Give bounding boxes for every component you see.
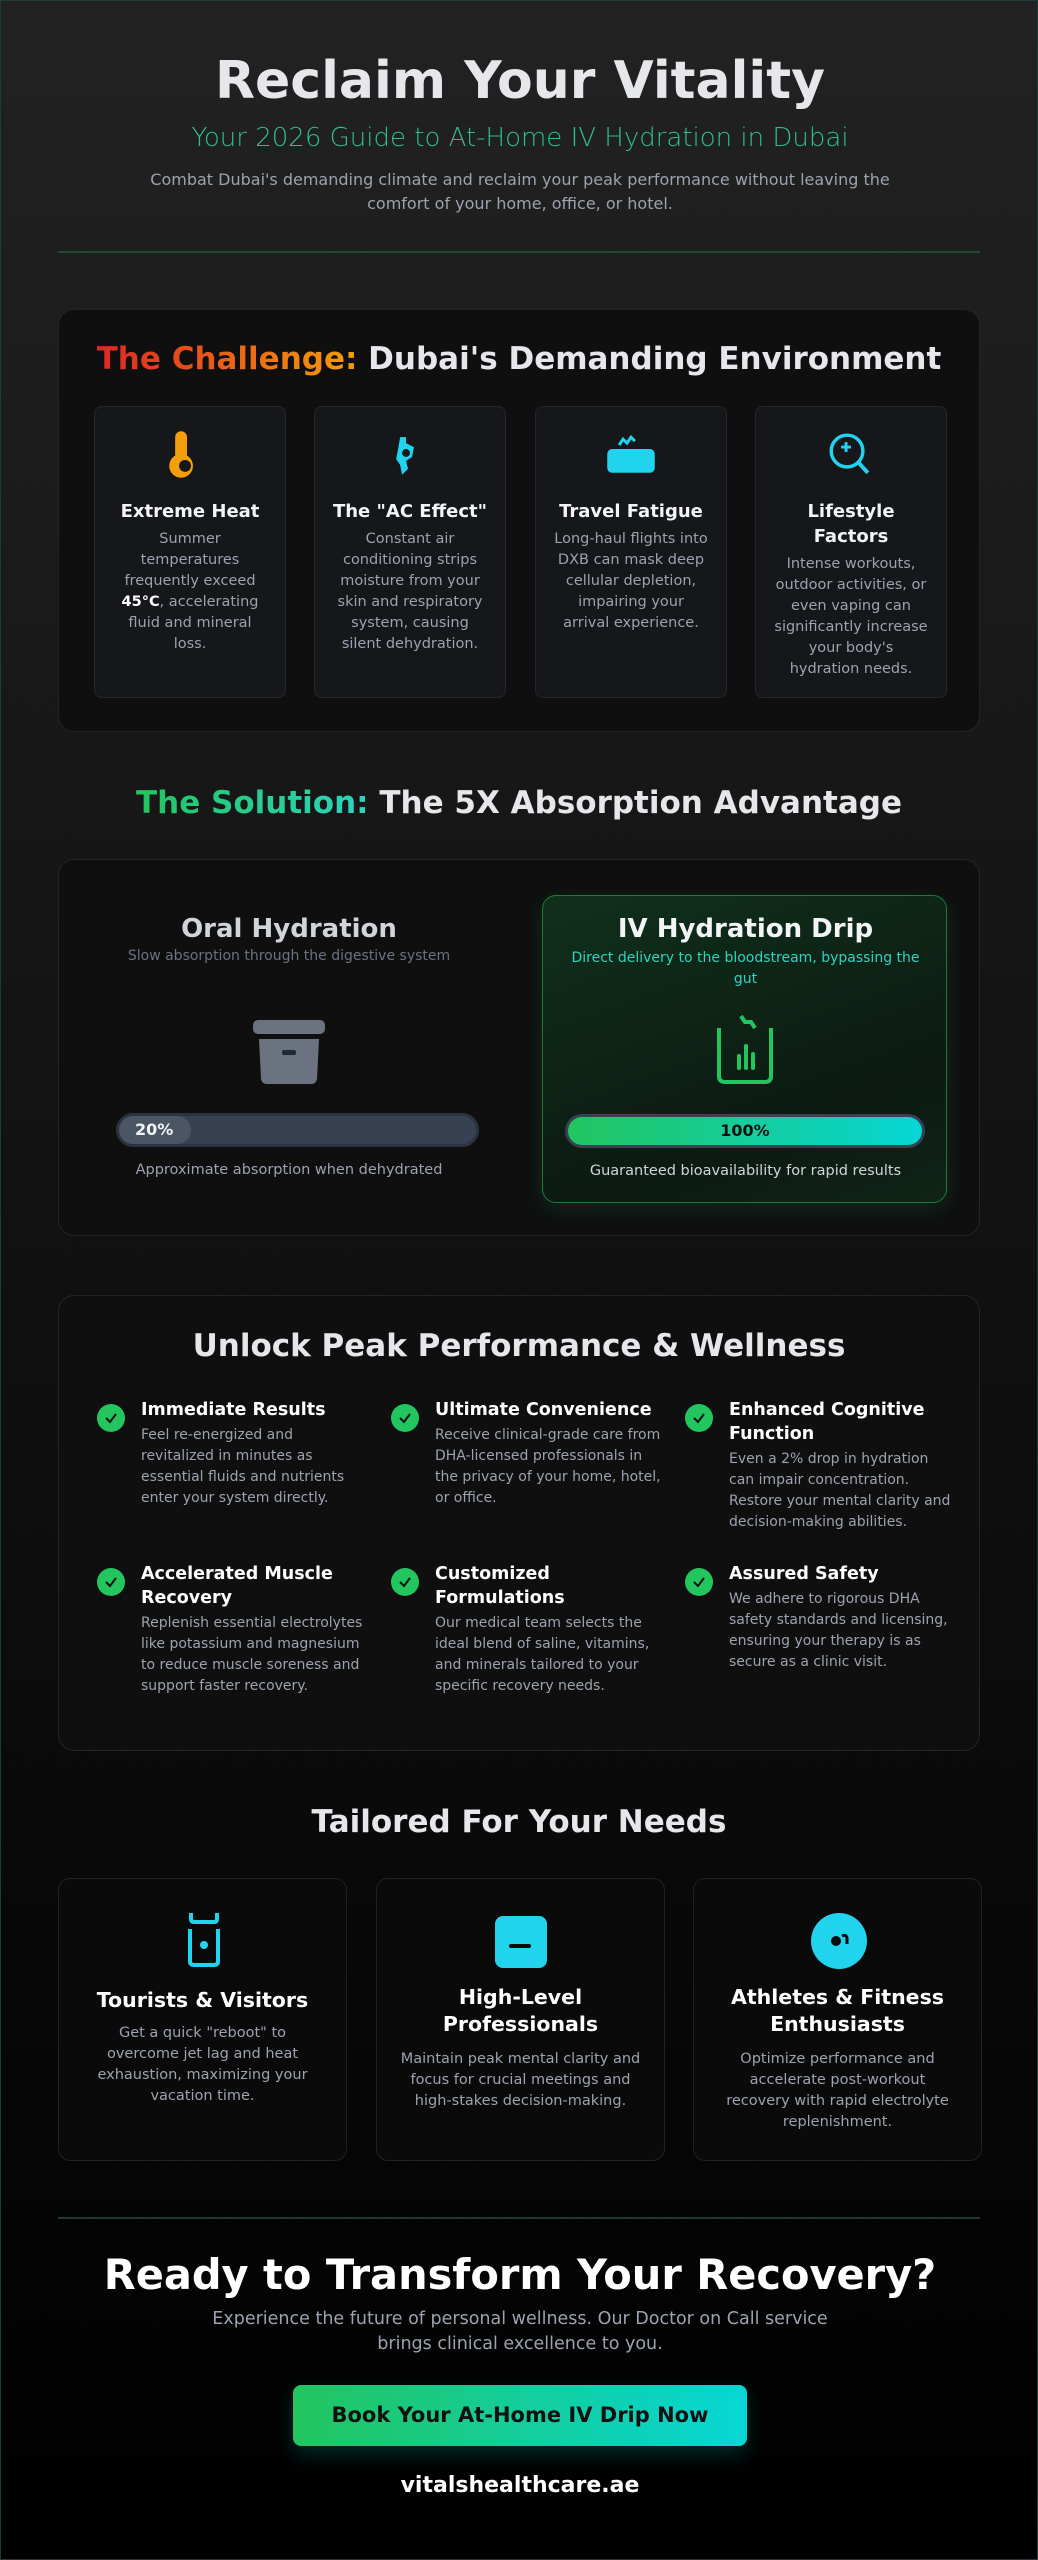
benefit: convenience xyxy=(391,1400,661,1506)
subtitle: Your 2026 Guide to At-Home IV Hydration in Dubai xyxy=(191,123,849,153)
card: travel fatigue xyxy=(535,406,727,698)
card: travel fatigue: Long-haul flights into DXB can mask deep cellular depletion, impairing your arrival experience. xyxy=(554,531,708,631)
card: lifestyle: Lifestyle xyxy=(807,501,895,522)
bar: 100% xyxy=(565,1114,925,1148)
text: Receive clinical-grade care from DHA-licensed professionals in the privacy of your home, hotel, or office. xyxy=(435,1427,661,1506)
heading: challenge: The Challenge: Dubai's Demanding Environment xyxy=(97,341,941,377)
text: Assured Safety xyxy=(729,1564,879,1584)
bar: 20%: 20% xyxy=(135,1120,173,1139)
text: We adhere to rigorous DHA safety standards and licensing, ensuring your therapy is as secure as a clinic visit. xyxy=(729,1591,948,1670)
icon: magnifier xyxy=(830,434,870,474)
icon: luggage xyxy=(188,1913,220,1967)
card: lifestyle: Intense workouts, outdoor activities, or even vaping can significantly increase your body's hydration needs. xyxy=(774,556,928,677)
card: professionals: Professionals xyxy=(443,2012,598,2036)
card: athletes: Enthusiasts xyxy=(770,2012,905,2036)
CTA subtext: Experience the future of personal wellness. Our Doctor on Call service brings clinical excellence to you. xyxy=(212,2309,828,2354)
CTA button xyxy=(293,2385,747,2446)
card: tourists: Tourists & Visitors xyxy=(97,1988,308,2012)
card: travel fatigue: Travel Fatigue xyxy=(559,501,703,522)
card: AC effect: Constant air conditioning strips moisture from your skin and respiratory system, causing silent dehydration. xyxy=(338,531,482,652)
card: professionals xyxy=(376,1878,665,2161)
icon: cup xyxy=(253,1020,325,1084)
card: professionals: High-Level xyxy=(459,1985,582,2009)
icon: IV bag xyxy=(717,1014,773,1084)
text: Feel re-energized and revitalized in minutes as essential fluids and nutrients enter your system directly. xyxy=(141,1427,344,1506)
IV drip card: Direct delivery to the bloodstream, bypassing the gut xyxy=(571,950,920,987)
card: professionals: Maintain peak mental clarity and focus for crucial meetings and high-stakes decision-making. xyxy=(401,2051,640,2109)
CTA heading: Ready to Transform Your Recovery? xyxy=(104,2250,936,2299)
text: Customized Formulations xyxy=(435,1564,565,1608)
CTA button: Book Your At-Home IV Drip Now xyxy=(331,2403,708,2427)
icon: suitcase xyxy=(607,434,655,473)
text: Our medical team selects the ideal blend of saline, vitamins, and minerals tailored to your specific recovery needs. xyxy=(435,1615,649,1694)
oral hydration column: Approximate absorption when dehydrated xyxy=(136,1162,442,1178)
text: Ultimate Convenience xyxy=(435,1400,652,1420)
IV drip card: Guaranteed bioavailability for rapid results xyxy=(590,1163,901,1179)
icon: thermometer xyxy=(169,431,193,478)
bar: 100%: 100% xyxy=(720,1121,770,1140)
benefit: safety xyxy=(685,1564,948,1670)
oral hydration column: Oral Hydration xyxy=(181,914,397,944)
card: tourists: Get a quick "reboot" to overcome jet lag and heat exhaustion, maximizing your vacation time. xyxy=(97,2025,308,2104)
text: Replenish essential electrolytes like potassium and magnesium to reduce muscle soreness and support faster recovery. xyxy=(141,1615,362,1694)
bar: 20% xyxy=(116,1113,479,1147)
heading: solution: The Solution: The 5X Absorption Advantage xyxy=(136,785,902,821)
website: vitalshealthcare.ae xyxy=(401,2473,639,2498)
icon: briefcase xyxy=(495,1916,547,1968)
intro text: Combat Dubai's demanding climate and reclaim your peak performance without leaving the comfort of your home, office, or hotel. xyxy=(150,170,890,213)
card: extreme heat: Extreme Heat xyxy=(121,501,259,522)
card: athletes xyxy=(693,1878,982,2161)
card: tourists xyxy=(58,1878,347,2161)
text: Even a 2% drop in hydration can impair concentration. Restore your mental clarity and decision-making abilities. xyxy=(729,1451,950,1530)
heading: benefits: Unlock Peak Performance & Wellness xyxy=(193,1328,845,1364)
text: Accelerated Muscle Recovery xyxy=(141,1564,333,1608)
card: extreme heat xyxy=(94,406,286,698)
card: lifestyle xyxy=(755,406,947,698)
panel: benefits xyxy=(58,1295,980,1751)
card: athletes: Optimize performance and accelerate post-workout recovery with rapid electrolyte replenishment. xyxy=(726,2051,949,2130)
icon: fan xyxy=(396,437,414,475)
text: Immediate Results xyxy=(141,1400,326,1420)
panel: challenge xyxy=(58,309,980,732)
benefit: formulations xyxy=(391,1564,649,1694)
benefit: cognitive xyxy=(685,1400,950,1530)
card: AC effect xyxy=(314,406,506,698)
heading: tailored: Tailored For Your Needs xyxy=(312,1804,726,1840)
benefit: muscle recovery xyxy=(97,1564,362,1694)
text: Enhanced Cognitive Function xyxy=(729,1400,924,1444)
icon: circle xyxy=(811,1913,867,1969)
panel: absorption comparison xyxy=(58,859,980,1236)
card: AC effect: The "AC Effect" xyxy=(333,501,487,522)
card: athletes: Athletes & Fitness xyxy=(731,1985,944,2009)
title: Reclaim Your Vitality xyxy=(215,51,825,111)
card: extreme heat: Summer temperatures frequently exceed 45°C, accelerating fluid and mineral loss. xyxy=(122,531,258,652)
IV drip card: IV Hydration Drip xyxy=(618,914,873,944)
oral hydration column: Slow absorption through the digestive system xyxy=(128,948,450,964)
IV drip card xyxy=(542,895,947,1203)
oral hydration column xyxy=(116,914,479,1178)
benefit: immediate results xyxy=(97,1400,344,1506)
card: lifestyle: Factors xyxy=(814,526,888,547)
